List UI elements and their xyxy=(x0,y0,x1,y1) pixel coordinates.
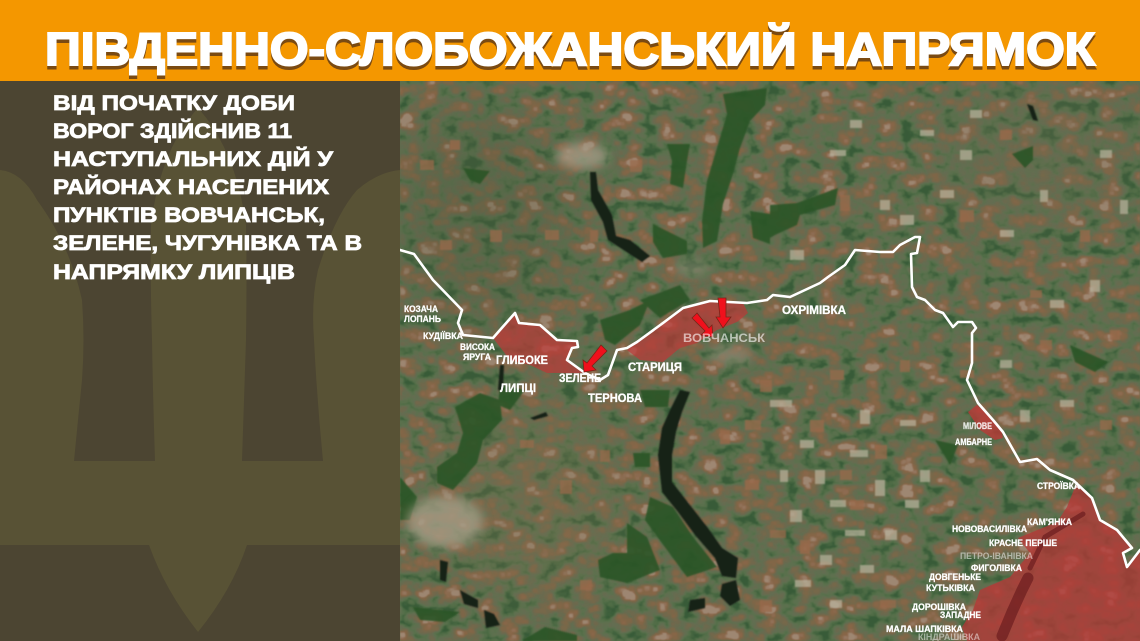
tonal zones xyxy=(390,80,1130,590)
arrow: Vovchansk west xyxy=(692,313,713,337)
map labels: СТАРИЦЯ xyxy=(628,362,682,374)
body text: НАСТУПАЛЬНИХ ДІЙ У xyxy=(53,147,334,171)
icon: trident watermark xyxy=(0,108,400,632)
body text: ВОРОГ ЗДІЙСНИВ 11 xyxy=(53,119,292,143)
map labels: ЗАПАДНЕ xyxy=(940,610,981,620)
map labels: ВОВЧАНСЬК xyxy=(683,331,766,345)
body text: НАПРЯМКУ ЛИПЦІВ xyxy=(53,261,295,284)
map labels: ПЕТРО-ІВАНІВКА xyxy=(960,551,1033,561)
map labels: ЗЕЛЕНЕ xyxy=(559,373,601,385)
map labels: ФИГОЛІВКА xyxy=(971,563,1022,573)
occupied area: Hlyboke xyxy=(493,313,585,373)
map labels: МІЛОВЕ xyxy=(963,421,992,431)
map labels: ГЛИБОКЕ xyxy=(496,355,548,367)
map labels xyxy=(404,304,1080,641)
occupied area: Milove xyxy=(968,405,1003,440)
map labels: КУДІЇВКА xyxy=(423,331,463,341)
map labels: ЛОПАНЬ xyxy=(404,314,441,324)
town areas xyxy=(407,143,752,548)
arrow: Vovchansk north xyxy=(716,298,731,328)
map labels: АМБАРНЕ xyxy=(955,437,992,447)
title: ПІВДЕННО-СЛОБОЖАНСЬКИЙ НАПРЯМОК xyxy=(45,23,1096,75)
body text: РАЙОНАХ НАСЕЛЕНИХ xyxy=(53,175,329,199)
left text panel xyxy=(0,81,400,641)
map labels: МАЛА ШАПКІВКА xyxy=(886,624,963,634)
map labels: КАМ'ЯНКА xyxy=(1027,517,1072,527)
map labels: ДОВГЕНЬКЕ xyxy=(929,572,981,582)
body text: ПУНКТІВ ВОВЧАНСЬК, xyxy=(53,204,325,227)
map labels: ОХРІМІВКА xyxy=(782,305,846,317)
title shadow: ПІВДЕННО-СЛОБОЖАНСЬКИЙ НАПРЯМОК xyxy=(45,26,1096,78)
arrow: Zelene xyxy=(583,345,607,372)
map labels: ДОРОШІВКА xyxy=(912,602,966,612)
body text: ЗЕЛЕНЕ, ЧУГУНІВКА ТА В xyxy=(53,232,362,255)
map labels: КРАСНЕ ПЕРШЕ xyxy=(989,538,1057,548)
map labels: СТРОЇВКА xyxy=(1037,481,1080,491)
body text: ВІД ПОЧАТКУ ДОБИ xyxy=(53,92,295,115)
map labels: ВИСОКА xyxy=(460,342,495,352)
title banner xyxy=(0,0,1140,81)
front line xyxy=(400,237,1140,567)
map labels: ЛИПЦІ xyxy=(500,383,536,395)
river and reservoirs xyxy=(440,104,1038,628)
occupied area: south-east xyxy=(962,482,1140,641)
map labels: ЯРУГА xyxy=(463,352,491,362)
forests xyxy=(400,88,1108,641)
map labels: КОЗАЧА xyxy=(404,304,438,314)
occupied area: Vovchansk xyxy=(627,301,748,362)
body text xyxy=(53,92,362,284)
map labels: КУТЬКІВКА xyxy=(926,583,975,593)
map labels: НОВОВАСИЛІВКА xyxy=(952,524,1027,534)
panel: satellite map xyxy=(390,80,1140,641)
farm field patches xyxy=(420,110,1128,612)
map labels: ТЕРНОВА xyxy=(588,393,642,405)
